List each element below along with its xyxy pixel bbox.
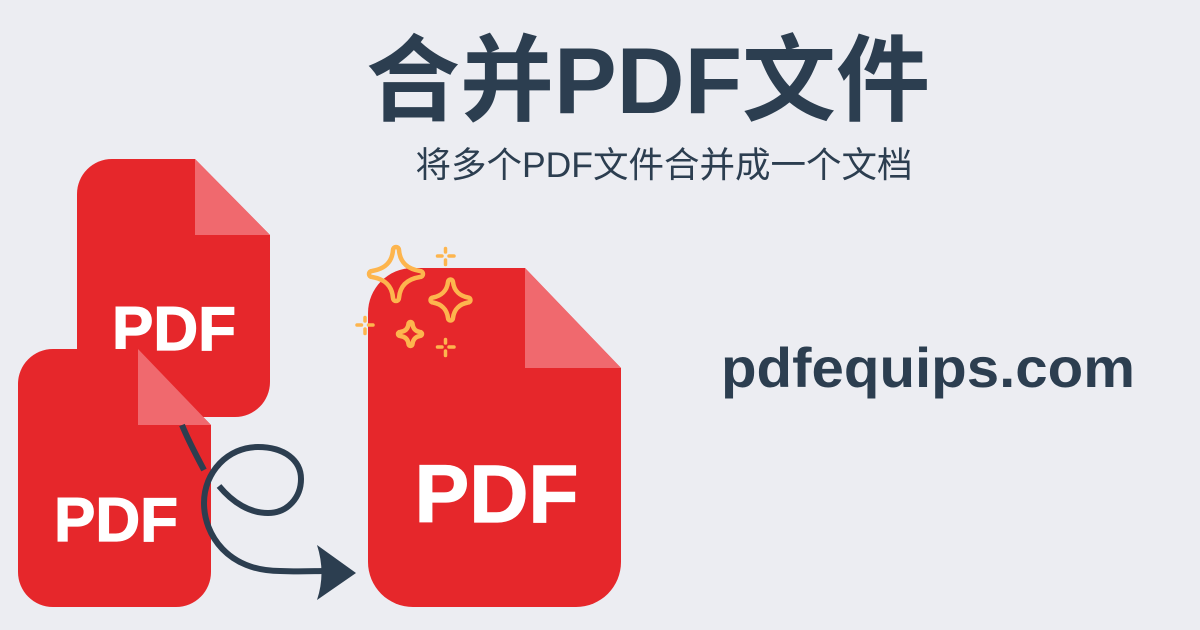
title: 合并PDF文件 — [366, 28, 930, 133]
icon: PDF document front — [18, 349, 211, 607]
icon: PDF document front: PDF — [54, 486, 178, 555]
icon: sparkles — [357, 247, 470, 356]
icon: PDF document back: PDF — [112, 295, 236, 364]
arrow: merge direction — [182, 425, 356, 600]
subtitle: 将多个PDF文件合并成一个文档 — [415, 145, 913, 185]
icon: merged PDF document — [368, 268, 621, 607]
website label: pdfequips.com — [721, 336, 1135, 399]
icon: PDF document back — [77, 159, 270, 417]
icon: merged PDF document: PDF — [414, 449, 578, 540]
